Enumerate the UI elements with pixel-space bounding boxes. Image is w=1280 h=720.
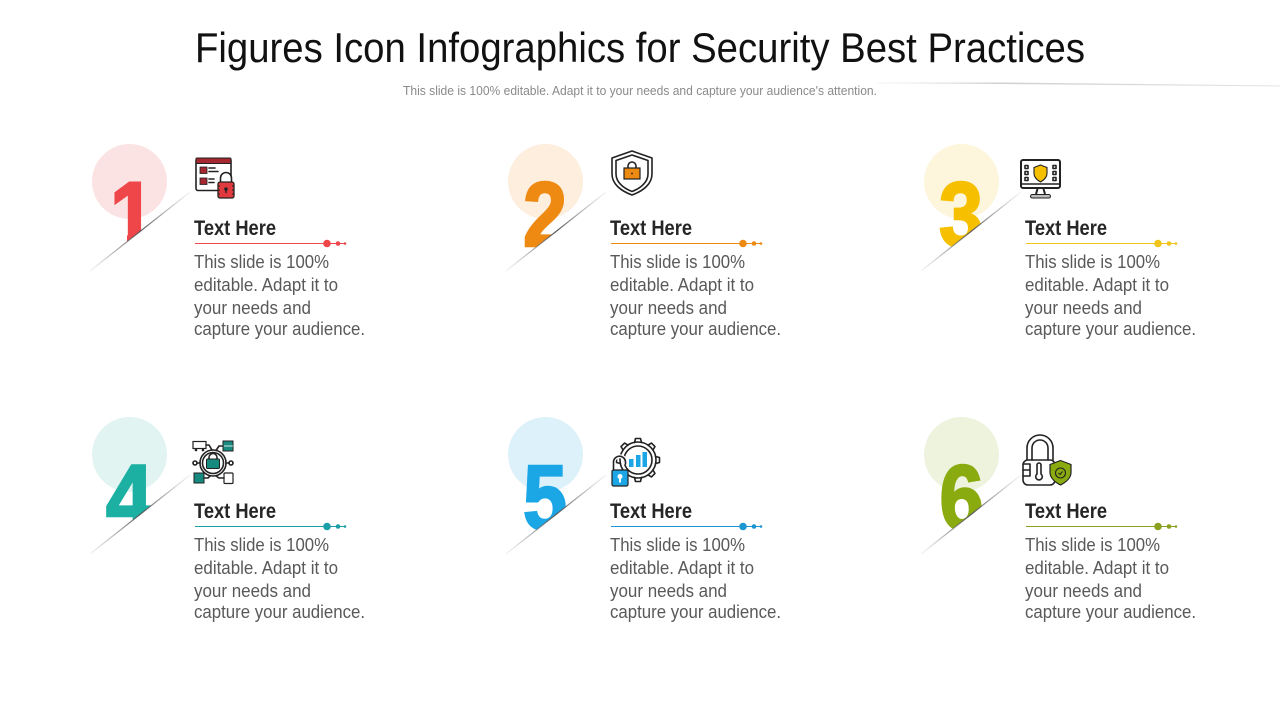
heading 6: Text Here xyxy=(1025,500,1107,523)
circle 4 xyxy=(92,417,167,492)
body text 5: your needs and xyxy=(610,581,727,601)
body text 4 xyxy=(194,535,365,622)
body text 6: This slide is 100% xyxy=(1025,535,1160,555)
subtitle: This slide is 100% editable. Adapt it to your needs and capture your audience's attention. xyxy=(403,84,877,98)
body text 6: capture your audience. xyxy=(1025,602,1196,622)
body text 3: capture your audience. xyxy=(1025,319,1196,339)
icon: checklist with padlock xyxy=(196,158,234,198)
rule 3 xyxy=(1026,240,1177,247)
number 6: 6 xyxy=(939,446,984,549)
number 5: 5 xyxy=(523,446,567,549)
heading 3: Text Here xyxy=(1025,217,1107,240)
rule 2 xyxy=(611,240,762,247)
panel: item 1 xyxy=(90,144,365,339)
body text 5: editable. Adapt it to xyxy=(610,558,754,578)
icon: shield with padlock xyxy=(612,151,652,195)
panel: item 6 xyxy=(921,417,1196,622)
number 2: 2 xyxy=(523,163,567,266)
heading 4: Text Here xyxy=(194,500,276,523)
diagonal 3 xyxy=(921,192,1021,271)
number 4: 4 xyxy=(106,446,153,549)
body text 3: your needs and xyxy=(1025,298,1142,318)
circle 6 xyxy=(924,417,999,492)
body text 3: This slide is 100% xyxy=(1025,252,1160,272)
body text 2: your needs and xyxy=(610,298,727,318)
body text 2 xyxy=(610,252,781,339)
panel: item 4 xyxy=(90,417,365,622)
number 3: 3 xyxy=(939,163,983,266)
body text 6: your needs and xyxy=(1025,581,1142,601)
body text 4: capture your audience. xyxy=(194,602,365,622)
circle 2 xyxy=(508,144,583,219)
body text 5 xyxy=(610,535,781,622)
body text 3 xyxy=(1025,252,1196,339)
header rule xyxy=(877,82,1280,86)
diagonal 5 xyxy=(506,475,606,554)
body text 1: This slide is 100% xyxy=(194,252,329,272)
title: Figures Icon Infographics for Security Best Practices xyxy=(195,24,1085,71)
heading 2: Text Here xyxy=(610,217,692,240)
circle 1 xyxy=(92,144,167,219)
panel: item 5 xyxy=(506,417,781,622)
rule 4 xyxy=(195,523,346,530)
rule 6 xyxy=(1026,523,1177,530)
panel: item 2 xyxy=(506,144,781,339)
number 1: 1 xyxy=(110,164,155,266)
body text 1 xyxy=(194,252,365,339)
diagonal 2 xyxy=(506,192,606,271)
icon: gear with chart and open padlock xyxy=(612,438,660,486)
heading 5: Text Here xyxy=(610,500,692,523)
heading 1: Text Here xyxy=(194,217,276,240)
rule 1 xyxy=(195,240,346,247)
icon: network padlock xyxy=(193,441,233,484)
body text 2: capture your audience. xyxy=(610,319,781,339)
body text 2: This slide is 100% xyxy=(610,252,745,272)
diagonal 4 xyxy=(90,475,190,554)
body text 4: editable. Adapt it to xyxy=(194,558,338,578)
body text 4: This slide is 100% xyxy=(194,535,329,555)
body text 4: your needs and xyxy=(194,581,311,601)
diagonal 1 xyxy=(90,192,190,271)
body text 1: editable. Adapt it to xyxy=(194,275,338,295)
body text 6: editable. Adapt it to xyxy=(1025,558,1169,578)
rule 5 xyxy=(611,523,762,530)
body text 2: editable. Adapt it to xyxy=(610,275,754,295)
body text 5: capture your audience. xyxy=(610,602,781,622)
icon: monitor with shield xyxy=(1021,160,1060,198)
body text 1: your needs and xyxy=(194,298,311,318)
circle 5 xyxy=(508,417,583,492)
diagonal 6 xyxy=(921,475,1021,554)
body text 1: capture your audience. xyxy=(194,319,365,339)
body text 3: editable. Adapt it to xyxy=(1025,275,1169,295)
body text 5: This slide is 100% xyxy=(610,535,745,555)
body text 6 xyxy=(1025,535,1196,622)
circle 3 xyxy=(924,144,999,219)
icon: padlock with shield xyxy=(1023,435,1071,485)
panel: item 3 xyxy=(921,144,1196,339)
